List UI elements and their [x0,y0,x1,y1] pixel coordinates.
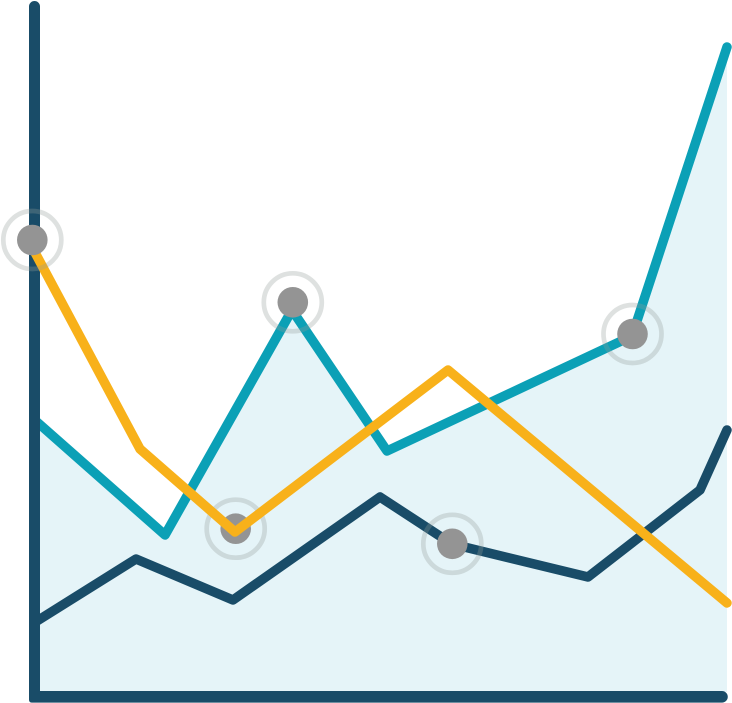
marker: teal right [604,305,662,363]
marker: dark line middle [423,515,481,573]
dark blue line [37,430,727,621]
marker: teal peak [264,273,322,331]
teal line [37,47,727,535]
marker: yellow line trough [207,500,265,558]
yellow line [31,245,727,603]
marker: yellow line start [3,211,61,269]
